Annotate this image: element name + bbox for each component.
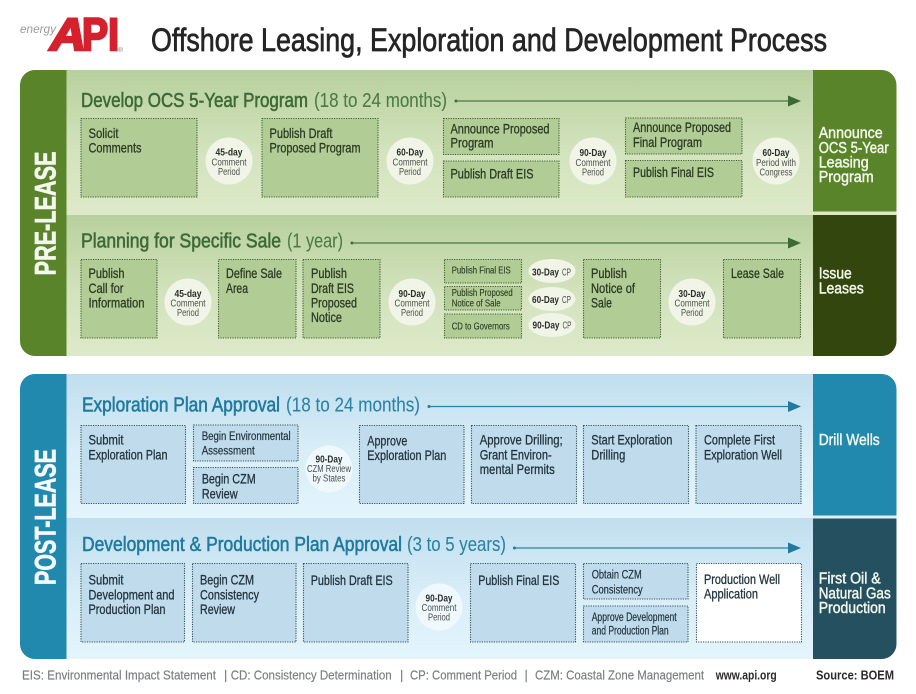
row: planning for specific sale: Planning for Specific Sale (81, 231, 281, 253)
footer: legend and source: | (524, 668, 528, 682)
row: planning for specific sale: Period (177, 308, 199, 319)
footer: legend and source: EIS: Environmental Impact Statement (22, 668, 216, 682)
row: develop OCS 5-year program: Congress (760, 168, 792, 178)
row: development and production plan approval: and Production Plan (592, 625, 669, 637)
row: develop OCS 5-year program: Develop OCS 5-Year Program (81, 90, 308, 112)
row: planning for specific sale: Sale (591, 295, 612, 311)
row: develop OCS 5-year program: Period with (756, 158, 796, 169)
row: planning for specific sale: Comment (394, 299, 430, 310)
row: development and production plan approval: Submit (88, 572, 124, 588)
row: develop OCS 5-year program: Leasing (819, 154, 869, 172)
row: develop OCS 5-year program: 60-Day (762, 148, 790, 159)
row: development and production plan approval: Period (428, 613, 450, 624)
row: planning for specific sale: CP (562, 268, 571, 279)
row: planning for specific sale: Call for (88, 280, 124, 296)
row: development and production plan approval: Consistency (592, 584, 643, 596)
row: exploration plan approval (81, 395, 880, 504)
row: development and production plan approval: Development & Production Plan Approval (82, 534, 402, 556)
logo: energy API: A (49, 9, 86, 60)
row: exploration plan approval: Approve Drilling; (480, 432, 563, 448)
row: develop OCS 5-year program: Period (582, 168, 604, 178)
footer: legend and source: Source: BOEM (816, 668, 894, 682)
row: exploration plan approval: Exploration Plan Approval (82, 395, 280, 417)
row: development and production plan approval: Production (819, 600, 886, 617)
row: planning for specific sale: 30-Day (678, 289, 706, 300)
row: development and production plan approval: Production Plan (88, 601, 166, 617)
row: development and production plan approval: Review (200, 601, 236, 617)
row: develop OCS 5-year program: Program (819, 169, 874, 186)
row: development and production plan approval: Publish Final EIS (478, 572, 559, 588)
row: develop OCS 5-year program: Publish Final EIS (633, 164, 714, 180)
row: develop OCS 5-year program: Comments (88, 140, 142, 156)
row: develop OCS 5-year program: Period (218, 167, 240, 178)
panel: post-lease (20, 374, 897, 660)
footer: legend and source: www.api.org (715, 668, 777, 682)
row: exploration plan approval: Exploration Plan (367, 447, 446, 463)
logo: energy API (20, 9, 124, 60)
row: planning for specific sale: 45-day (174, 289, 202, 300)
row: development and production plan approval: 90-Day (426, 593, 453, 604)
row: develop OCS 5-year program: 45-day (216, 148, 243, 159)
row: development and production plan approval: Consistency (200, 586, 259, 602)
row: planning for specific sale: Proposed (311, 295, 357, 311)
row: planning for specific sale: Notice of (591, 280, 635, 296)
row: develop OCS 5-year program: Proposed Program (270, 140, 360, 156)
row: exploration plan approval: Drilling (591, 446, 625, 462)
logo: energy API: ® (118, 47, 124, 54)
row: exploration plan approval: Complete First (704, 432, 775, 448)
row: exploration plan approval: Start Exploration (591, 432, 672, 448)
row: develop OCS 5-year program: Solicit (88, 125, 119, 141)
row: development and production plan approval: (3 to 5 years) (407, 534, 506, 556)
row: develop OCS 5-year program: Publish Draft (270, 125, 333, 141)
row: development and production plan approval (81, 534, 891, 642)
footer: legend and source: | (400, 668, 403, 682)
row: develop OCS 5-year program (81, 90, 889, 197)
row: development and production plan approval: Comment (422, 603, 457, 614)
row: exploration plan approval: Submit (88, 432, 124, 448)
logo: energy API: energy (20, 24, 57, 36)
row: development and production plan approval: Begin CZM (200, 572, 254, 588)
row: planning for specific sale: Lease Sale (731, 265, 784, 281)
row: planning for specific sale: 90-Day (398, 289, 426, 300)
row: planning for specific sale: Publish (88, 265, 124, 281)
row: planning for specific sale: Publish Proposed (452, 287, 513, 299)
row: develop OCS 5-year program: (18 to 24 months) (314, 90, 447, 112)
row: development and production plan approval: Production Well (704, 571, 780, 587)
row: develop OCS 5-year program: Announce (819, 125, 883, 142)
row: develop OCS 5-year program: Comment (576, 158, 611, 169)
row: exploration plan approval: (18 to 24 months) (286, 395, 420, 417)
row: planning for specific sale: Area (226, 280, 248, 296)
footer: legend and source: CZM: Coastal Zone Management (535, 668, 704, 682)
row: exploration plan approval: mental Permits (480, 461, 555, 477)
row: develop OCS 5-year program: Period (399, 167, 421, 178)
row: development and production plan approval: Approve Development (592, 612, 677, 624)
row: planning for specific sale: Publish (591, 265, 627, 281)
row: planning for specific sale: Comment (674, 299, 710, 310)
label: post-lease: POST-LEASE (29, 449, 62, 585)
panel: pre-lease (20, 70, 897, 356)
row: development and production plan approval: Publish Draft EIS (311, 572, 393, 588)
row: planning for specific sale: 90-Day (532, 321, 560, 332)
row: planning for specific sale: (1 year) (287, 231, 343, 253)
row: planning for specific sale: CP (562, 321, 572, 332)
row: planning for specific sale: 60-Day (532, 295, 559, 306)
row: develop OCS 5-year program: 90-Day (580, 148, 607, 159)
row: exploration plan approval: Drill Wells (819, 432, 880, 449)
footer: legend and source (22, 668, 894, 682)
footer: legend and source: | (224, 668, 227, 682)
row: planning for specific sale: Period (401, 308, 423, 319)
row: planning for specific sale: Publish Final EIS (452, 264, 511, 276)
row: planning for specific sale: Draft EIS (311, 280, 354, 296)
row: exploration plan approval: Approve (367, 432, 407, 448)
row: planning for specific sale: Define Sale (226, 265, 282, 281)
row: planning for specific sale: 30-Day (532, 268, 559, 279)
row: planning for specific sale: Comment (170, 299, 206, 310)
row: exploration plan approval: Begin CZM (202, 471, 256, 487)
row: development and production plan approval: Development and (88, 586, 174, 602)
row: exploration plan approval: Exploration Well (704, 446, 782, 462)
row: planning for specific sale: Issue (819, 265, 852, 282)
row: develop OCS 5-year program: Program (450, 135, 494, 151)
row: develop OCS 5-year program: 60-Day (396, 148, 424, 159)
row: planning for specific sale: Information (88, 295, 144, 311)
row: exploration plan approval: Begin Environmental (202, 431, 291, 443)
row: development and production plan approval: Application (704, 586, 758, 602)
row: planning for specific sale: Notice of Sale (452, 297, 501, 309)
row: planning for specific sale: Period (681, 308, 703, 319)
row: development and production plan approval: Natural Gas (819, 585, 891, 602)
row: develop OCS 5-year program: Announce Proposed (450, 120, 550, 136)
row: planning for specific sale: Notice (311, 309, 342, 325)
row: development and production plan approval: Obtain CZM (592, 569, 642, 581)
row: exploration plan approval: Grant Environ- (480, 446, 552, 462)
footer: legend and source: CD: Consistency Determination (231, 668, 392, 682)
row: planning for specific sale: Publish (311, 265, 347, 281)
row: develop OCS 5-year program: Announce Proposed (633, 119, 731, 135)
footer: legend and source: CP: Comment Period (410, 668, 517, 682)
row: planning for specific sale: CP (562, 295, 571, 306)
row: develop OCS 5-year program: Final Program (633, 134, 702, 150)
row: exploration plan approval: 90-Day (316, 454, 343, 465)
row: develop OCS 5-year program: OCS 5-Year (819, 140, 889, 157)
logo: energy API: PI (82, 9, 119, 60)
row: exploration plan approval: Review (202, 485, 238, 501)
row: planning for specific sale: CD to Governors (452, 320, 510, 332)
row: development and production plan approval: First Oil & (819, 570, 881, 587)
row: develop OCS 5-year program: Publish Draft EIS (450, 166, 534, 182)
row: develop OCS 5-year program: Comment (392, 158, 428, 168)
row: planning for specific sale (81, 231, 864, 338)
row: exploration plan approval: Assessment (202, 445, 255, 457)
row: exploration plan approval: Exploration Plan (88, 446, 168, 462)
label: pre-lease: PRE-LEASE (29, 152, 62, 276)
row: exploration plan approval: CZM Review (307, 464, 352, 475)
row: planning for specific sale: Leases (819, 280, 864, 297)
row: exploration plan approval: by States (312, 474, 346, 485)
row: develop OCS 5-year program: Comment (212, 158, 247, 168)
